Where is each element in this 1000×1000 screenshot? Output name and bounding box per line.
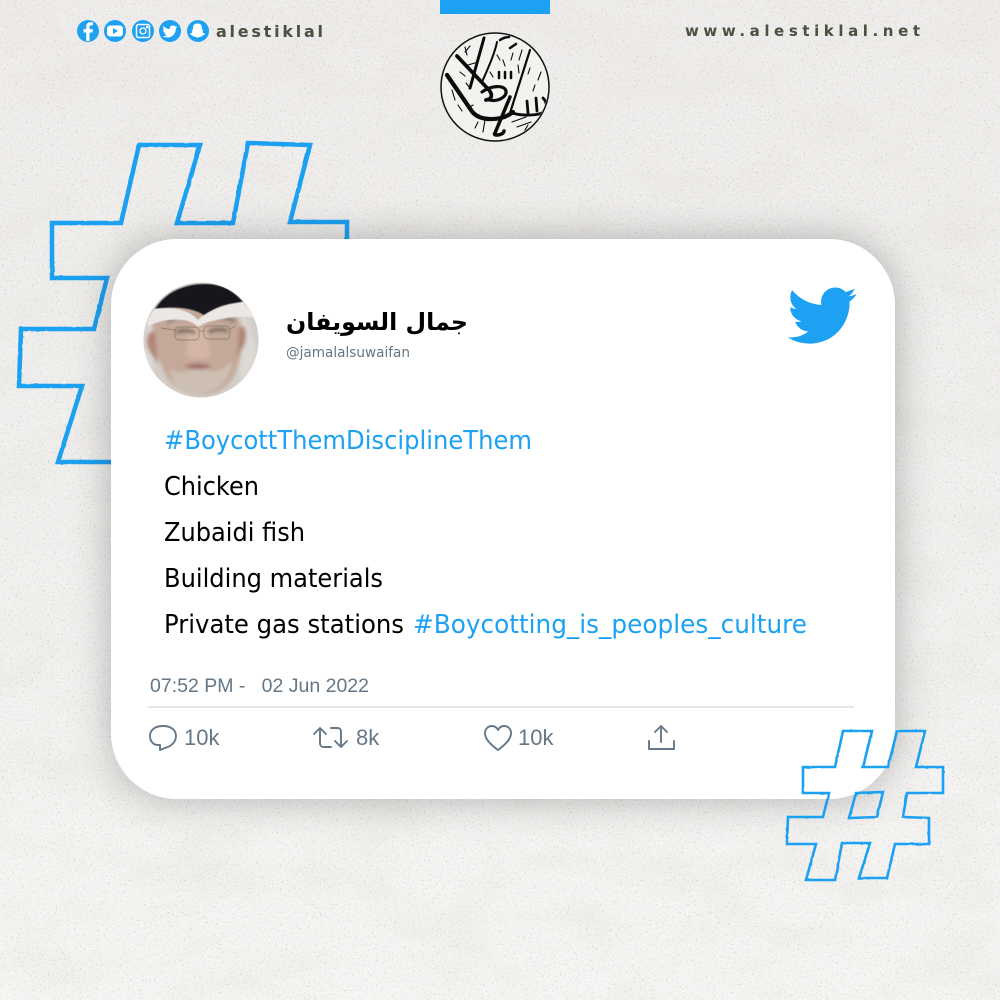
top accent bar	[440, 0, 550, 14]
line: building materials: Building materials	[164, 564, 383, 594]
timestamp: 07:52 PM - 02 Jun 2022	[150, 675, 369, 697]
hashtag: boycotting: #Boycotting_is_peoples_culture	[413, 610, 807, 640]
icon: snapchat	[187, 20, 209, 42]
icon: retweet	[314, 728, 347, 747]
tweet text	[164, 426, 807, 640]
hashtag line: #BoycottThemDisciplineThem	[164, 426, 532, 456]
website address: www.alestiklal.net	[685, 22, 920, 40]
icon: reply	[150, 726, 176, 750]
icon: twitter bird	[788, 287, 857, 344]
action row	[150, 725, 674, 750]
like count: 10k	[518, 725, 554, 750]
reply count: 10k	[184, 725, 220, 750]
line: chicken: Chicken	[164, 472, 259, 502]
avatar portrait	[140, 280, 262, 400]
line: private gas stations: Private gas stations	[164, 610, 404, 640]
icon: heart	[485, 726, 511, 750]
line: zubaidi fish: Zubaidi fish	[164, 518, 305, 548]
icon: instagram	[132, 20, 154, 42]
icon: facebook	[77, 20, 99, 42]
icon: share	[649, 726, 674, 749]
social icons row	[77, 20, 209, 42]
brand name: alestiklal	[216, 22, 323, 41]
icon: youtube	[104, 20, 126, 42]
small hashtag outline over card corner	[787, 731, 943, 880]
big hashtag outline behind card	[19, 143, 347, 462]
retweet count: 8k	[356, 725, 380, 750]
icon: circular calligraphy logo	[441, 33, 549, 141]
author name: جمال السويفان	[286, 308, 468, 336]
panel: tweet card	[111, 239, 895, 799]
author handle: @jamalalsuwaifan	[286, 345, 410, 361]
icon: twitter	[159, 20, 181, 42]
